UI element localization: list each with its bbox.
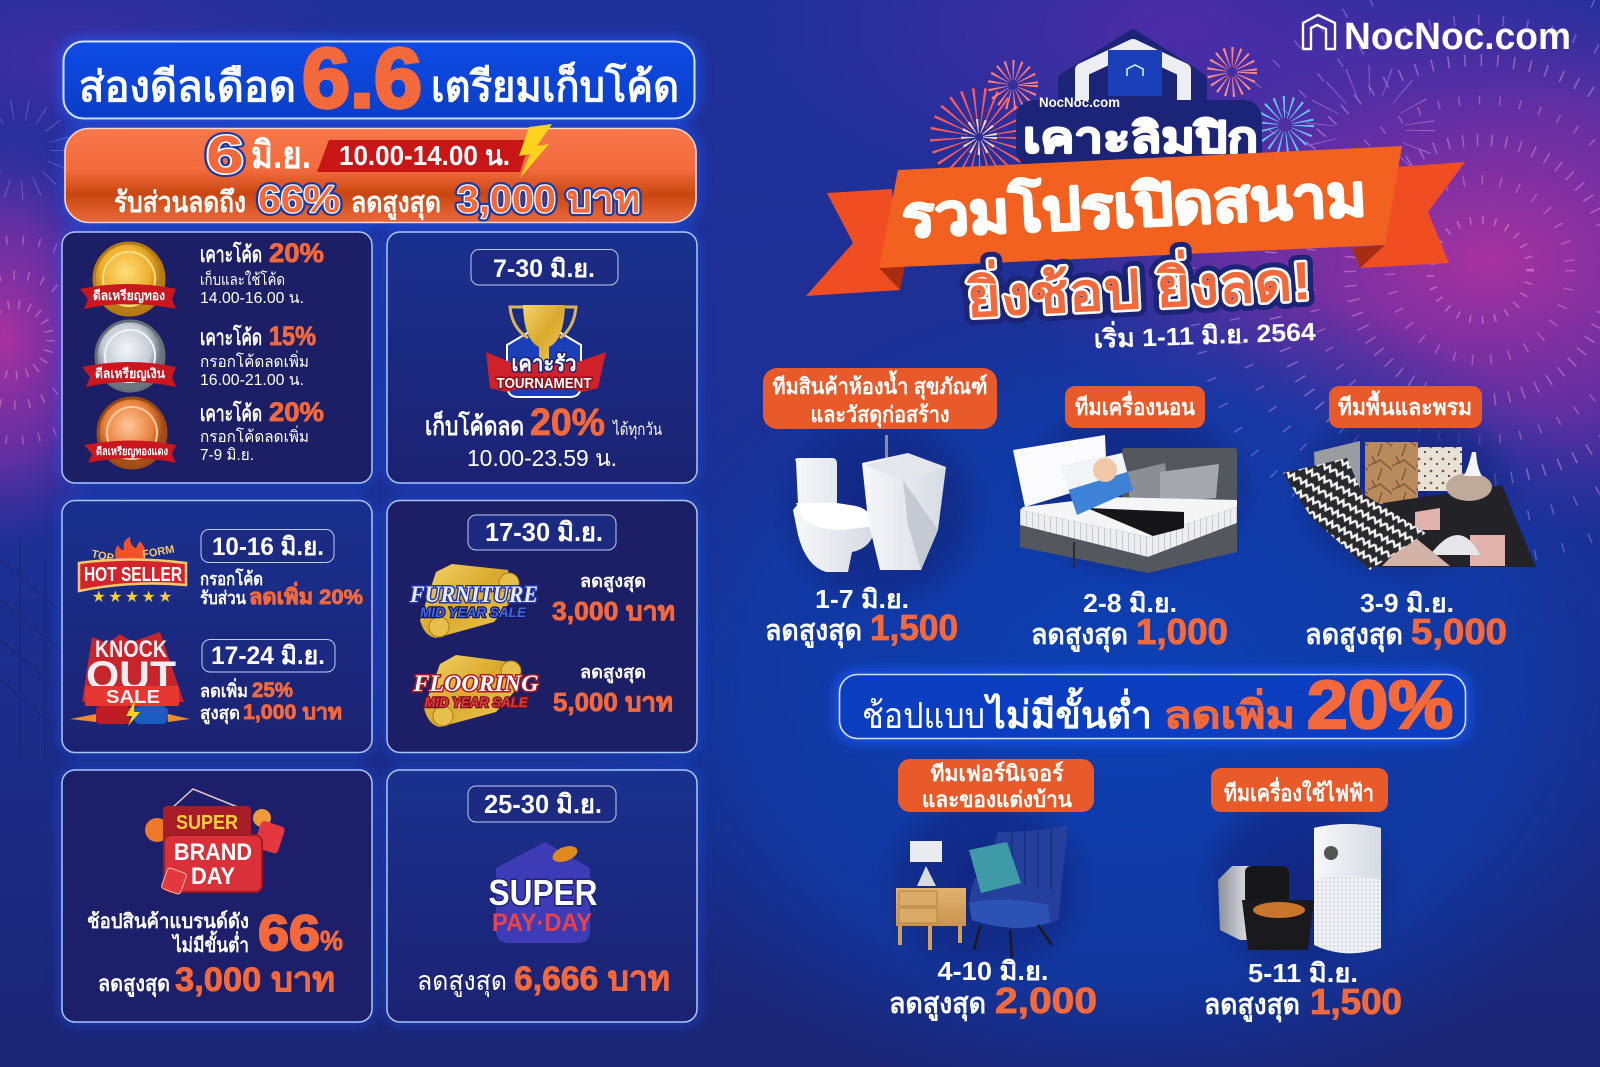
date pill <box>471 250 618 285</box>
icon: super pay day <box>488 842 598 943</box>
text: furniture discount: 3,000 บาท <box>552 596 675 626</box>
team label: bathroom: และวัสดุก่อสร้าง <box>810 402 950 429</box>
badge: furniture: FURNITURE <box>409 582 538 607</box>
icon: super pay day: PAY·DAY <box>492 909 592 937</box>
text: gold coupon: 14.00-16.00 น. <box>200 290 304 307</box>
text: furniture discount: ลดสูงสุด <box>580 571 646 593</box>
date and discount: appliances: 1,500 <box>1310 981 1402 1022</box>
icon: knock out sale: KNOCK <box>95 636 168 663</box>
offer text: 1,000 บาท <box>243 701 342 724</box>
slogan: ยิ่งช้อป ยิ่งลด!: ยิ่งช้อป ยิ่งลด! <box>965 242 1313 329</box>
offer text: 25% <box>252 679 293 702</box>
date pill: 17-30 มิ.ย. <box>485 517 603 547</box>
icon: hot seller: HOT SELLER <box>84 564 182 586</box>
team label: bedding <box>1065 386 1205 428</box>
panel: medal coupons <box>60 229 374 485</box>
icon: bed and pillow <box>1013 435 1237 573</box>
flash sale banner: มิ.ย. <box>251 135 311 177</box>
slogan: ยิ่งช้อป ยิ่งลด!: ยิ่งช้อป ยิ่งลด! <box>965 242 1313 329</box>
icon: hot seller: ★ ★ ★ ★ ★ <box>92 589 172 604</box>
date and discount: bedding: 2-8 มิ.ย. <box>1083 588 1177 618</box>
flash sale banner: 6 <box>206 125 244 185</box>
panel: hot seller and knock out <box>60 498 374 755</box>
text: bronze coupon: เคาะโค้ด <box>200 400 262 426</box>
icon: tournament trophy <box>486 305 606 397</box>
date pill: 25-30 มิ.ย. <box>484 789 602 819</box>
ribbon banner: รวมโปรเปิดสนาม <box>806 146 1465 296</box>
campaign badge: เคาะลิมปิก: เคาะลิมปิก <box>1023 114 1258 161</box>
icon: hot seller <box>79 537 186 604</box>
date and discount: flooring and carpet: 3-9 มิ.ย. <box>1360 588 1454 618</box>
team label: bathroom <box>763 368 997 429</box>
banner: no minimum spend: ช้อปแบบ <box>862 695 985 736</box>
date and discount: furniture: 4-10 มิ.ย. <box>938 956 1048 986</box>
offer text: กรอกโค้ด <box>200 568 263 589</box>
title band: เตรียมเก็บโค้ด <box>431 61 679 110</box>
team label: flooring and carpet: ทีมพื้นและพรม <box>1338 390 1472 420</box>
offer text: ลดเพิ่ม 20% <box>249 581 363 609</box>
icon: toilet and sink <box>793 435 946 572</box>
banner: no minimum spend: ลดเพิ่ม <box>1164 688 1295 737</box>
team label: bedding: ทีมเครื่องนอน <box>1075 390 1195 420</box>
icon: tournament trophy: เคาะรัว <box>512 351 576 376</box>
flash sale banner: 66% <box>258 179 340 221</box>
icon: super pay day: SUPER <box>488 872 598 913</box>
date and discount: bedding: 1,000 <box>1136 611 1228 652</box>
icon: bronze medal: ดีลเหรียญทองแดง <box>96 445 168 458</box>
text: silver coupon: กรอกโค้ดลดเพิ่ม <box>200 350 309 371</box>
team label: furniture and decor: และของแต่งบ้าน <box>922 787 1072 812</box>
campaign badge: เคาะลิมปิก: NocNoc.com <box>1039 94 1120 110</box>
badge: furniture: MID YEAR SALE <box>420 604 527 620</box>
flash sale banner: ลดสูงสุด <box>351 187 441 220</box>
text: bronze coupon <box>200 397 324 464</box>
date line: เริ่ม 1-11 มิ.ย. 2564 <box>1093 314 1316 354</box>
badge: flooring: MID YEAR SALE <box>424 694 528 710</box>
icon: air fryer and purifier <box>1218 824 1381 953</box>
text: silver coupon: 16.00-21.00 น. <box>200 372 304 389</box>
icon: gold medal <box>80 243 176 315</box>
text: silver coupon: เคาะโค้ด <box>200 324 262 350</box>
text: gold coupon: 20% <box>269 238 324 268</box>
date and discount: appliances <box>1204 958 1402 1022</box>
icon: knock out sale: SALE <box>106 687 160 707</box>
text: furniture discount <box>552 571 675 626</box>
date and discount: appliances: 5-11 มิ.ย. <box>1248 958 1358 988</box>
icon: silver medal <box>82 321 176 391</box>
logo: NocNoc.com: NocNoc.com <box>1344 16 1571 58</box>
text: bronze coupon: 20% <box>269 397 324 427</box>
offer text: ได้ทุกวัน <box>611 419 662 440</box>
offer text: % <box>320 925 343 956</box>
offer text <box>200 568 363 609</box>
banner: no minimum spend <box>836 667 1469 743</box>
offer text <box>417 960 670 998</box>
icon: rug and tiles <box>1283 441 1536 570</box>
offer text: ไม่มีขั้นต่ำ <box>171 930 249 957</box>
ribbon banner: รวมโปรเปิดสนาม: รวมโปรเปิดสนาม <box>900 160 1368 250</box>
text: silver coupon: 15% <box>269 321 316 351</box>
icon: knock out sale <box>70 632 190 726</box>
text: bronze coupon: กรอกโค้ดลดเพิ่ม <box>200 425 309 446</box>
text: gold coupon: เคาะโค้ด <box>200 241 262 267</box>
icon: knock out sale: OUT <box>86 654 176 698</box>
campaign badge: เคาะลิมปิก <box>1016 33 1262 168</box>
date and discount: bedding: ลดสูงสุด <box>1031 619 1128 652</box>
text: gold coupon <box>200 238 324 307</box>
team label: bathroom: ทีมสินค้าห้องน้ำ สุขภัณฑ์ <box>772 370 988 401</box>
flash sale banner: รับส่วนลดถึง <box>114 187 246 219</box>
badge: furniture <box>409 564 538 638</box>
flash sale banner: 6 <box>206 125 244 185</box>
text: flooring discount: ลดสูงสุด <box>580 662 646 684</box>
product glows <box>770 395 1525 985</box>
date and discount: bedding <box>1031 588 1228 652</box>
offer text: ลดเพิ่ม <box>200 678 248 701</box>
date and discount: furniture: ลดสูงสุด <box>889 988 986 1021</box>
icon: hot seller: FORM <box>141 544 175 561</box>
date pill <box>468 786 616 822</box>
icon: gold medal: ดีลเหรียญทอง <box>93 288 165 304</box>
offer text: ช้อปสินค้าแบรนด์ดัง <box>87 910 249 933</box>
panel: super brand day <box>60 767 374 1025</box>
offer text: 6,666 บาท <box>514 960 670 998</box>
icon: super brand day sign <box>145 789 286 895</box>
icon: super brand day sign: BRAND <box>174 839 252 866</box>
icon: armchair and nightstand <box>896 825 1068 958</box>
date and discount: flooring and carpet: 5,000 <box>1411 611 1507 652</box>
panel: mid year sale <box>385 498 699 755</box>
text: flooring discount: 5,000 บาท <box>553 687 673 717</box>
title band <box>60 31 698 125</box>
team label: appliances <box>1211 768 1388 812</box>
text: flooring discount <box>553 662 673 717</box>
icon: bronze medal <box>84 398 176 468</box>
banner: no minimum spend: ไม่มีขั้นต่ำ <box>983 687 1152 737</box>
date pill: 17-24 มิ.ย. <box>211 642 325 670</box>
title band: 6.6 <box>302 31 422 125</box>
icon: super brand day sign: SUPER <box>176 812 239 834</box>
badge: flooring <box>412 655 539 727</box>
icon: tournament trophy: TOURNAMENT <box>496 375 592 392</box>
flash sale banner <box>62 124 699 226</box>
date pill: 10-16 มิ.ย. <box>212 533 324 561</box>
offer text: รับส่วน <box>200 588 247 608</box>
panel: tournament <box>385 229 699 485</box>
flash sale banner: 3,000 บาท <box>457 179 640 221</box>
team label: furniture and decor: ทีมเฟอร์นิเจอร์ <box>930 761 1064 786</box>
text: gold coupon: เก็บและใช้โค้ด <box>200 269 285 289</box>
offer text: 20% <box>530 402 605 444</box>
offer text <box>200 678 342 725</box>
offer text: ลดสูงสุด <box>98 971 170 998</box>
date and discount: furniture: 2,000 <box>995 980 1097 1021</box>
team label: flooring and carpet <box>1329 386 1482 428</box>
badge: flooring: FLOORING <box>412 671 539 696</box>
date and discount: bathroom: 1-7 มิ.ย. <box>815 584 909 614</box>
date and discount: bathroom: ลดสูงสุด <box>765 615 862 648</box>
date and discount: bathroom <box>765 584 958 648</box>
offer text: 3,000 บาท <box>175 961 335 999</box>
date pill <box>468 515 616 550</box>
offer text: 66 <box>258 905 320 961</box>
date and discount: flooring and carpet <box>1305 588 1507 652</box>
date and discount: appliances: ลดสูงสุด <box>1204 989 1300 1022</box>
icon: hot seller: TOP <box>90 548 115 565</box>
date and discount: bathroom: 1,500 <box>870 607 958 648</box>
offer text: ลดสูงสุด <box>417 966 507 998</box>
panel: super pay day <box>385 767 699 1025</box>
flash sale banner: 66% <box>258 179 340 221</box>
offer text: 10.00-23.59 น. <box>467 445 617 471</box>
text: silver coupon <box>200 321 316 389</box>
banner: no minimum spend: 20% <box>1307 667 1453 743</box>
flash sale banner: 3,000 บาท <box>457 179 640 221</box>
title band: ส่องดีลเดือด <box>79 63 296 110</box>
team label: appliances: ทีมเครื่องใช้ไฟฟ้า <box>1224 776 1374 806</box>
offer text: เก็บโค้ดลด <box>425 410 524 441</box>
team label: furniture and decor <box>898 759 1094 812</box>
flash sale banner: 10.00-14.00 น. <box>339 140 510 171</box>
offer text: สูงสุด <box>200 703 240 725</box>
offer text <box>425 402 662 471</box>
date pill: 7-30 มิ.ย. <box>493 255 595 283</box>
fireworks around campaign badge <box>949 57 1303 167</box>
date and discount: furniture <box>889 956 1097 1021</box>
icon: super brand day sign: DAY <box>191 863 235 890</box>
offer text <box>87 905 343 999</box>
icon: silver medal: ดีลเหรียญเงิน <box>95 366 165 382</box>
text: bronze coupon: 7-9 มิ.ย. <box>200 447 254 464</box>
date and discount: flooring and carpet: ลดสูงสุด <box>1305 619 1403 652</box>
